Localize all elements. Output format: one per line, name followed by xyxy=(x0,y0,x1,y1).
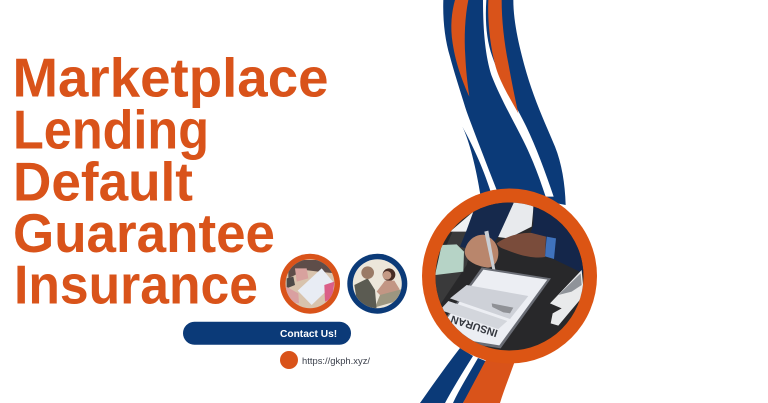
website link: https://gkph.xyz/ xyxy=(302,355,370,366)
ribbon: upper navy wave xyxy=(443,0,566,205)
right sleeve xyxy=(531,200,583,273)
money xyxy=(435,244,464,275)
house model xyxy=(550,270,584,326)
left sleeve xyxy=(460,200,515,248)
link dot xyxy=(280,351,298,369)
document label: INSURAN xyxy=(449,312,499,339)
thin navy stripe xyxy=(462,127,491,197)
contact button: Contact Us! xyxy=(280,329,337,340)
window background xyxy=(450,212,473,232)
left hand xyxy=(465,235,498,268)
title: Lending xyxy=(13,98,209,160)
navy body xyxy=(443,0,566,205)
pen xyxy=(484,230,496,270)
title: Marketplace xyxy=(12,47,328,109)
key xyxy=(492,303,513,313)
photo circle: orange xyxy=(280,254,340,314)
ribbon: lower navy and orange band xyxy=(420,348,516,403)
right hand xyxy=(497,233,546,258)
white stripe xyxy=(483,0,554,197)
contact button xyxy=(183,322,351,345)
title: Insurance xyxy=(14,254,258,316)
orange streak right xyxy=(488,0,518,113)
document xyxy=(447,267,551,348)
title: Default xyxy=(13,150,193,212)
cuff xyxy=(545,237,556,259)
table xyxy=(436,202,584,350)
main circular photo xyxy=(422,188,597,364)
title: Guarantee xyxy=(13,202,275,264)
orange streak left xyxy=(451,0,469,97)
photo circle: navy xyxy=(347,254,407,314)
orange ring xyxy=(422,188,597,364)
title xyxy=(12,47,328,315)
website link xyxy=(280,351,370,369)
